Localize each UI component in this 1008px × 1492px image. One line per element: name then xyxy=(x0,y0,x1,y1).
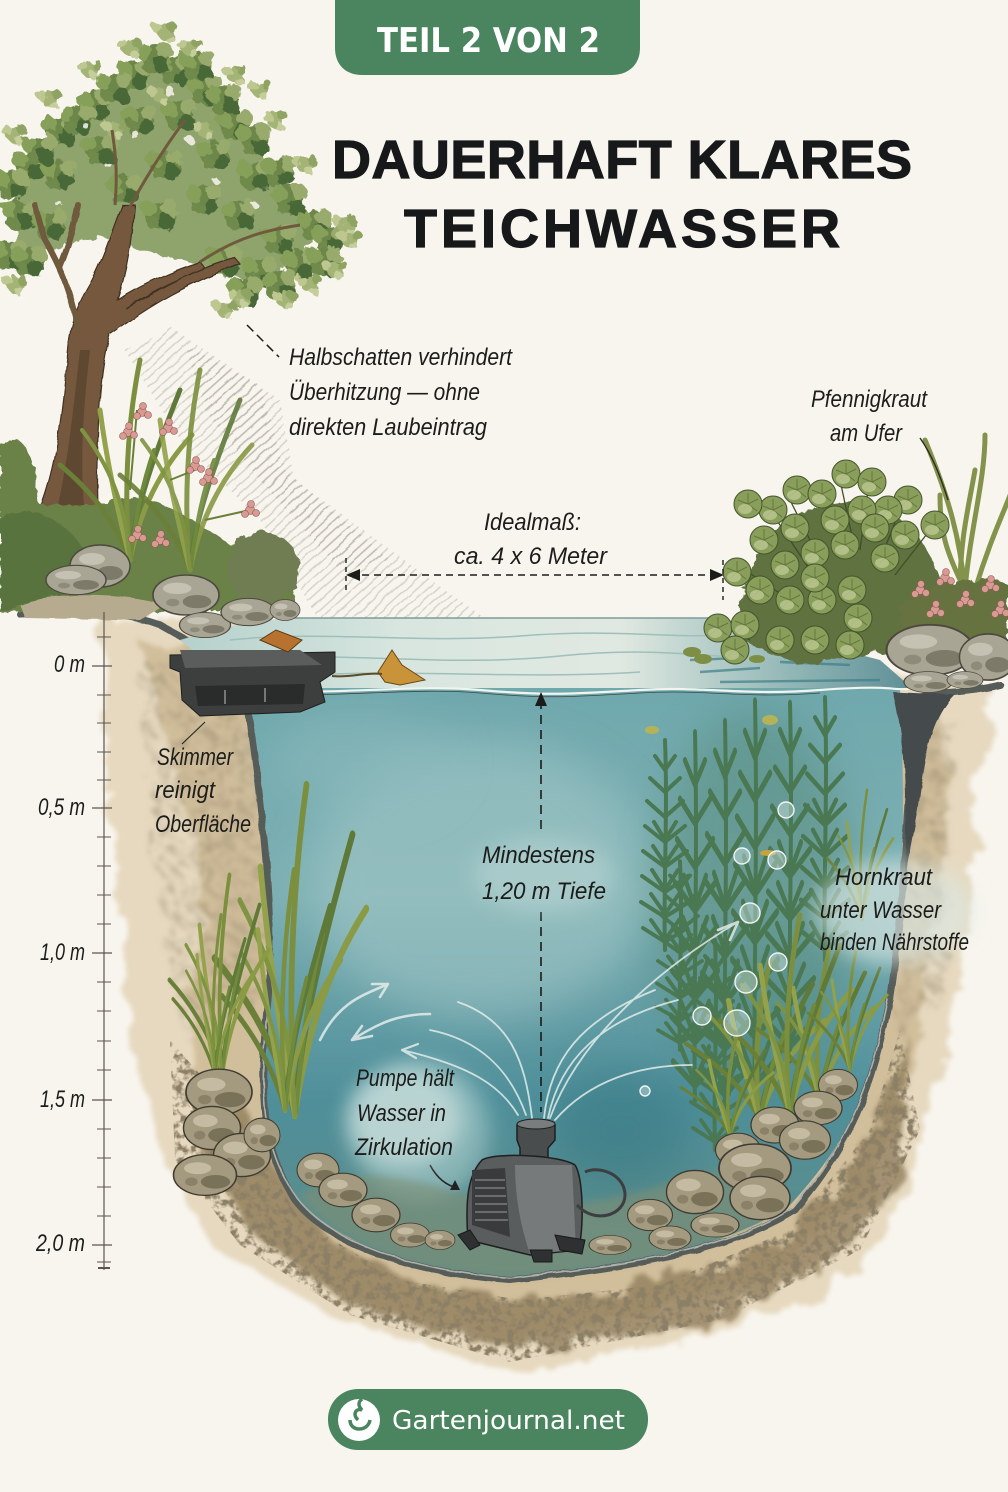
icon: logo xyxy=(338,1399,380,1441)
label: Idealmaß: ca. 4 x 6 Meter xyxy=(454,543,608,570)
illustration: tree xyxy=(0,22,362,508)
label: Hornkraut xyxy=(820,864,969,956)
arrow: shadow leader xyxy=(247,325,279,357)
illustration: rocks around pond floor xyxy=(174,1069,858,1255)
badge: part indicator: TEIL 2 VON 2 xyxy=(377,21,600,61)
canopy xyxy=(0,22,362,320)
label: Mindestens: 1,20 m Tiefe xyxy=(482,878,606,905)
label: Mindestens: Mindestens xyxy=(482,842,595,869)
label: Hornkraut: binden Nährstoffe xyxy=(820,929,969,956)
label: Halbschatten: direkten Laubeintrag xyxy=(289,414,488,441)
shadow hatching xyxy=(125,328,490,622)
water surface xyxy=(180,618,915,697)
scale labels: 0,5 m xyxy=(38,794,85,821)
scale labels: 1,5 m xyxy=(40,1086,85,1113)
title xyxy=(332,130,912,259)
scale labels: 0 m xyxy=(54,651,85,678)
label: Skimmer: Oberfläche xyxy=(155,811,251,838)
footer: brand pill xyxy=(328,1389,648,1450)
pond liner xyxy=(20,613,1000,1280)
title: TEICHWASSER xyxy=(404,199,840,259)
trunk and branches xyxy=(40,205,240,508)
arrow: pond width xyxy=(346,558,724,600)
illustration: skimmer xyxy=(170,630,425,716)
label: Mindestens xyxy=(482,842,606,905)
label: Hornkraut: unter Wasser xyxy=(820,897,942,924)
label: Hornkraut: Hornkraut xyxy=(835,864,933,891)
label: Idealmaß: Idealmaß: xyxy=(484,509,581,536)
footer: brand pill: Gartenjournal.net xyxy=(392,1406,625,1436)
label: Halbschatten: Halbschatten verhindert xyxy=(289,344,513,371)
label: Halbschatten xyxy=(289,344,513,441)
icon: bubbles xyxy=(640,802,794,1096)
label: Pfennigkraut xyxy=(811,386,928,447)
illustration: hornwort underwater xyxy=(641,698,849,1150)
panel: pond water body xyxy=(248,688,903,1278)
soil cross-section xyxy=(100,618,1000,1372)
label: Pumpe: Wasser in xyxy=(357,1100,446,1127)
text halo xyxy=(347,837,973,1166)
scale labels xyxy=(35,651,85,1257)
title: DAUERHAFT KLARES xyxy=(332,130,912,190)
label: Pumpe: Pumpe hält xyxy=(356,1065,455,1092)
label: Idealmaß xyxy=(454,509,608,570)
label: Skimmer xyxy=(155,744,251,838)
label: Pumpe: Zirkulation xyxy=(354,1134,453,1161)
label: Pfennigkraut: Pfennigkraut xyxy=(811,386,928,413)
arrow: pennywort leader xyxy=(920,438,948,500)
illustration: water jets xyxy=(320,922,738,1120)
scale labels: 1,0 m xyxy=(40,939,85,966)
scale labels: 2,0 m xyxy=(35,1230,85,1257)
label: Skimmer: reinigt xyxy=(155,777,216,804)
label: Pfennigkraut: am Ufer xyxy=(830,420,903,447)
label: Skimmer: Skimmer xyxy=(157,744,234,771)
illustration: pump xyxy=(430,1119,625,1262)
badge: part indicator xyxy=(335,0,640,75)
label: Halbschatten: Überhitzung — ohne xyxy=(289,379,480,406)
scale ruler xyxy=(92,612,112,1270)
icon: floating leaves xyxy=(260,630,425,685)
illustration: pennywort bank xyxy=(683,435,1008,692)
illustration: left bank plants xyxy=(0,360,300,638)
illustration: underwater grasses xyxy=(170,785,893,1135)
label: Pumpe xyxy=(354,1065,455,1161)
arrow: skimmer leader xyxy=(182,722,205,744)
arrow: minimum depth xyxy=(535,692,547,1112)
